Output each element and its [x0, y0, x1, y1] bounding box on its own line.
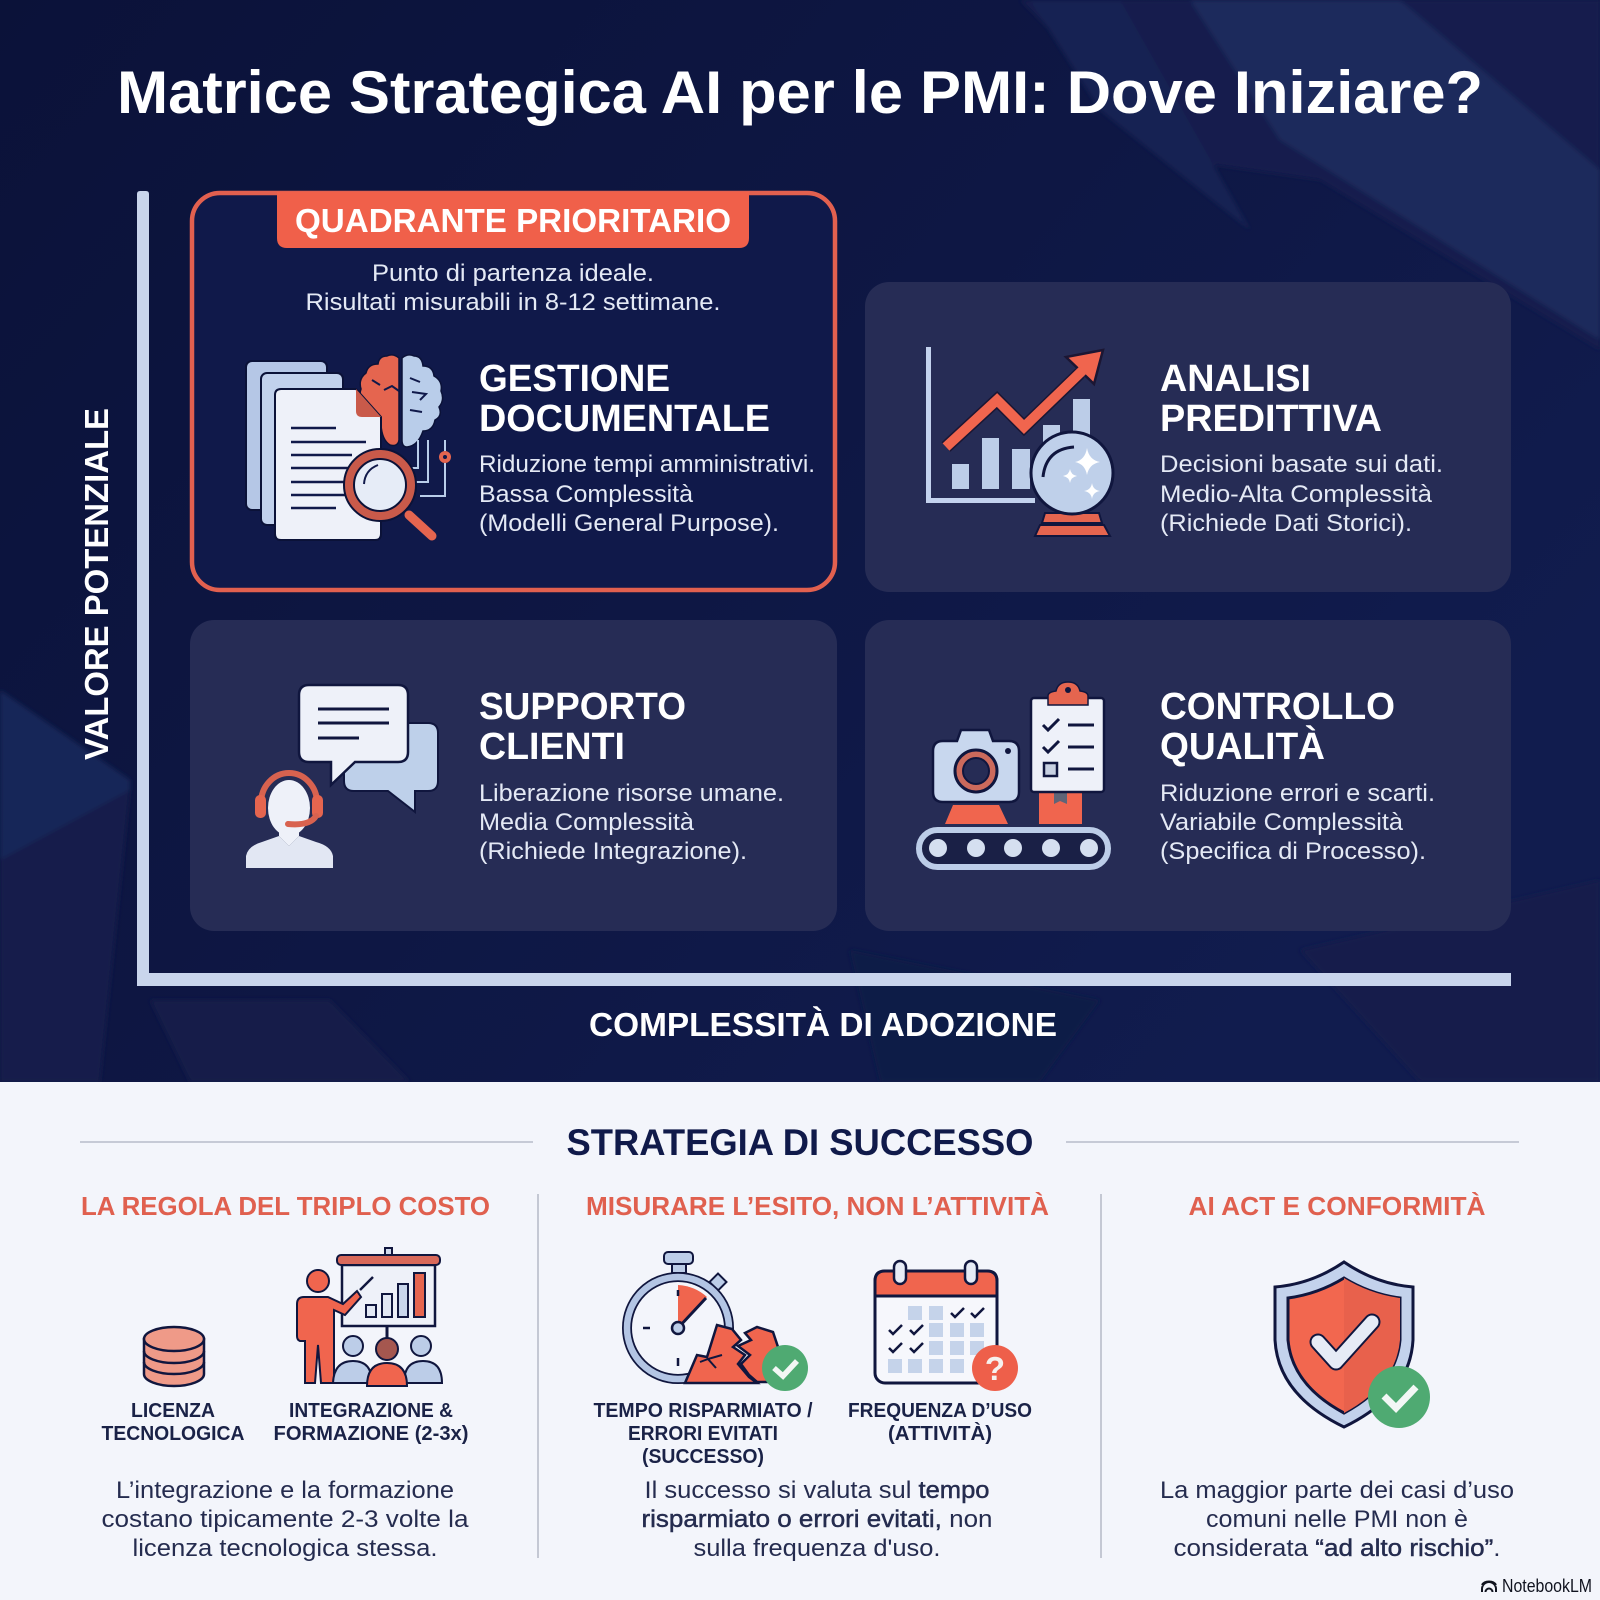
priority description: Risultati misurabili in 8-12 settimane.	[306, 289, 720, 316]
description: Variabile Complessità	[1160, 809, 1404, 836]
heading: DOCUMENTALE	[479, 398, 770, 440]
description: L’integrazione e la formazione	[116, 1477, 454, 1504]
title: Matrice Strategica AI per le PMI: Dove Iniziare?	[117, 59, 1483, 126]
heading: SUPPORTO	[479, 686, 686, 728]
heading: CLIENTI	[479, 726, 625, 768]
description	[1160, 780, 1435, 865]
label: tempo risparmiato	[594, 1400, 813, 1468]
description: Riduzione tempi amministrativi.	[479, 451, 815, 478]
heading: PREDITTIVA	[1160, 398, 1382, 440]
icon: camera, clipboard and conveyor	[919, 682, 1108, 867]
label: tempo risparmiato: ERRORI EVITATI	[628, 1423, 778, 1445]
heading	[1160, 686, 1395, 768]
subheading: LA REGOLA DEL TRIPLO COSTO	[81, 1191, 490, 1221]
panel: supporto clienti	[190, 620, 837, 931]
heading: QUALITÀ	[1160, 724, 1325, 768]
subheading: AI ACT E CONFORMITÀ	[1188, 1191, 1486, 1221]
label: licenza tecnologica	[102, 1400, 244, 1445]
description: Decisioni basate sui dati.	[1160, 451, 1443, 478]
heading	[479, 358, 770, 440]
label: licenza tecnologica: TECNOLOGICA	[102, 1423, 244, 1445]
icon: shield with check	[1275, 1262, 1430, 1428]
label: frequenza d'uso: FREQUENZA D’USO	[848, 1400, 1032, 1422]
label: licenza tecnologica: LICENZA	[131, 1400, 215, 1422]
heading: GESTIONE	[479, 358, 670, 400]
x axis label: COMPLESSITÀ DI ADOZIONE	[589, 1006, 1057, 1043]
label: integrazione e formazione: FORMAZIONE (2-3x)	[274, 1423, 468, 1445]
panel: regola del triplo costo	[81, 1191, 490, 1562]
priority description	[306, 260, 720, 316]
label: integrazione e formazione: INTEGRAZIONE &	[289, 1400, 453, 1422]
label: frequenza d'uso: (ATTIVITÀ)	[888, 1422, 992, 1445]
icon: chart and crystal ball	[926, 347, 1113, 536]
priority description: Punto di partenza ideale.	[372, 260, 654, 287]
panel: misurare l'esito	[586, 1191, 1049, 1562]
description: Liberazione risorse umane.	[479, 780, 784, 807]
icon: database	[144, 1327, 204, 1386]
panel: ai act e conformita	[1160, 1191, 1514, 1562]
description	[479, 780, 784, 865]
icon: documents, brain and magnifier	[246, 355, 451, 540]
label: tempo risparmiato: TEMPO RISPARMIATO /	[594, 1400, 813, 1422]
description	[479, 451, 815, 537]
icon: calendar with question mark: ?	[985, 1350, 1005, 1387]
description: Medio-Alta Complessità	[1160, 481, 1433, 508]
label: frequenza d'uso	[848, 1400, 1032, 1445]
description: Riduzione errori e scarti.	[1160, 780, 1435, 807]
badge: quadrante prioritario: QUADRANTE PRIORITARIO	[295, 202, 731, 239]
badge: quadrante prioritario	[277, 192, 749, 248]
description: costano tipicamente 2-3 volte la	[102, 1506, 469, 1533]
description: comuni nelle PMI non è	[1206, 1506, 1468, 1533]
description	[1160, 451, 1443, 537]
description: risparmiato o errori evitati, non	[642, 1506, 992, 1533]
label: integrazione e formazione	[274, 1400, 468, 1445]
panel: controllo qualita	[865, 620, 1511, 931]
section heading: strategia di successo: STRATEGIA DI SUCCESSO	[566, 1122, 1034, 1163]
description: (Modelli General Purpose).	[479, 510, 779, 537]
dark background	[0, 0, 1600, 1082]
y axis label: VALORE POTENZIALE	[78, 408, 115, 760]
subheading: MISURARE L’ESITO, NON L’ATTIVITÀ	[586, 1191, 1049, 1221]
icon: headset operator and chat bubbles	[246, 685, 438, 868]
heading: ANALISI	[1160, 358, 1311, 400]
description: La maggior parte dei casi d’uso	[1160, 1477, 1514, 1504]
panel: analisi predittiva	[865, 282, 1511, 592]
description: Media Complessità	[479, 809, 695, 836]
icon: stopwatch, broken rock and check	[627, 1252, 808, 1391]
icon: calendar with question mark	[875, 1261, 1018, 1391]
matrix axes	[137, 191, 1511, 986]
light bottom background	[0, 1082, 1600, 1600]
description: considerata “ad alto rischio” .	[1174, 1535, 1500, 1562]
description: sulla frequenza d'uso.	[694, 1535, 940, 1562]
icon: presenter with chart and audience	[297, 1248, 442, 1386]
description	[102, 1477, 469, 1562]
heading	[1160, 358, 1382, 440]
description: Bassa Complessità	[479, 481, 694, 508]
description	[1160, 1477, 1514, 1562]
label: tempo risparmiato: (SUCCESSO)	[642, 1446, 764, 1468]
description	[642, 1477, 992, 1562]
heading	[479, 686, 686, 768]
description: Il successo si valuta sul tempo	[644, 1477, 990, 1504]
panel: gestione documentale	[192, 192, 835, 590]
description: (Richiede Dati Storici).	[1160, 510, 1412, 537]
heading: CONTROLLO	[1160, 686, 1395, 728]
description: licenza tecnologica stessa.	[132, 1535, 438, 1562]
description: (Specifica di Processo).	[1160, 838, 1426, 865]
description: (Richiede Integrazione).	[479, 838, 747, 865]
